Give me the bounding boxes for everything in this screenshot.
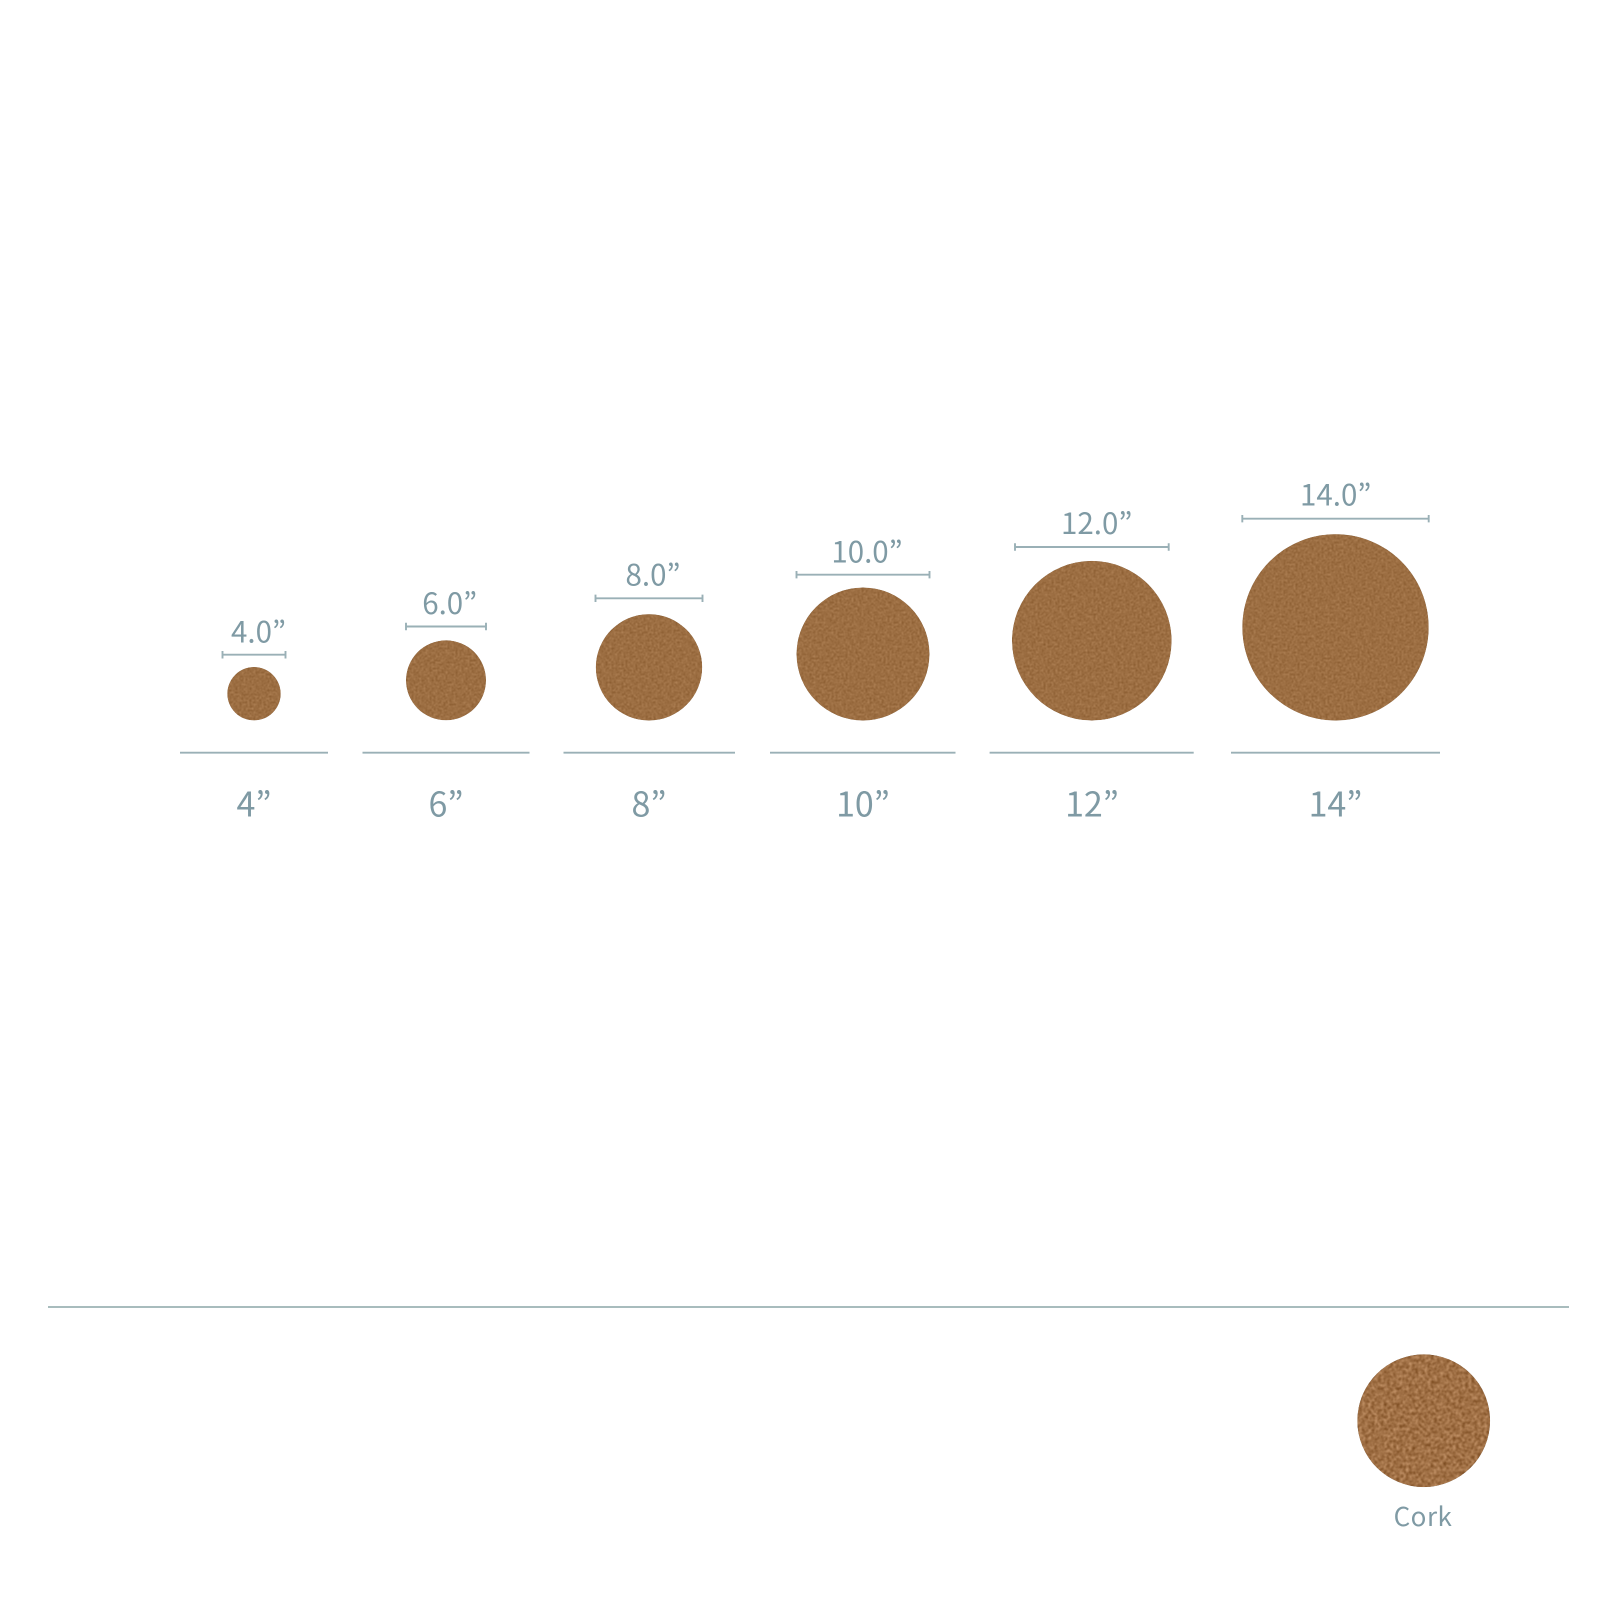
dimension bracket: 8.0 xyxy=(596,595,702,602)
cork circle: 6 inch xyxy=(406,640,486,720)
baseline rule: 14 inch xyxy=(1231,752,1440,754)
dimension label: 10.0: 10.0” xyxy=(831,529,903,571)
size column: 4 inch xyxy=(180,609,328,827)
dimension label: 4.0: 4.0” xyxy=(231,609,286,651)
size label: 4 inch: 4” xyxy=(236,778,272,827)
material swatch: cork xyxy=(1357,1354,1490,1534)
dimension bracket: 4.0 xyxy=(222,651,286,658)
size label: 14 inch: 14” xyxy=(1309,778,1362,827)
dimension bracket: 10.0 xyxy=(796,571,930,578)
size label: 10 inch: 10” xyxy=(836,778,890,827)
size column: 10 inch xyxy=(770,529,956,827)
dimension bracket: 12.0 xyxy=(1015,543,1169,551)
baseline rule: 10 inch xyxy=(770,752,956,754)
cork circle: 8 inch xyxy=(596,614,702,720)
baseline rule: 12 inch xyxy=(990,752,1194,754)
size column: 8 inch xyxy=(564,553,735,827)
cork circle: 10 inch xyxy=(796,588,930,720)
swatch label: Cork xyxy=(1394,1497,1453,1534)
dimension label: 12.0: 12.0” xyxy=(1061,501,1132,543)
dimension label: 14.0: 14.0” xyxy=(1300,473,1371,515)
size column: 6 inch xyxy=(362,581,530,827)
size column: 12 inch xyxy=(990,501,1194,827)
baseline rule: 6 inch xyxy=(362,752,530,754)
cork circle: 4 inch xyxy=(227,667,281,720)
baseline rule: 8 inch xyxy=(564,752,735,754)
cork circle: 14 inch xyxy=(1242,534,1429,720)
dimension bracket: 14.0 xyxy=(1242,515,1429,522)
baseline rule: 4 inch xyxy=(180,752,328,754)
dimension label: 6.0: 6.0” xyxy=(422,581,477,623)
dimension bracket: 6.0 xyxy=(406,623,486,630)
dimension label: 8.0: 8.0” xyxy=(626,553,680,595)
cork circle: 12 inch xyxy=(1012,561,1172,720)
swatch circle xyxy=(1357,1354,1490,1487)
size label: 6 inch: 6” xyxy=(428,778,464,827)
size label: 12 inch: 12” xyxy=(1065,778,1119,827)
section divider xyxy=(48,1306,1569,1308)
size label: 8 inch: 8” xyxy=(632,778,666,827)
size column: 14 inch xyxy=(1231,473,1440,827)
